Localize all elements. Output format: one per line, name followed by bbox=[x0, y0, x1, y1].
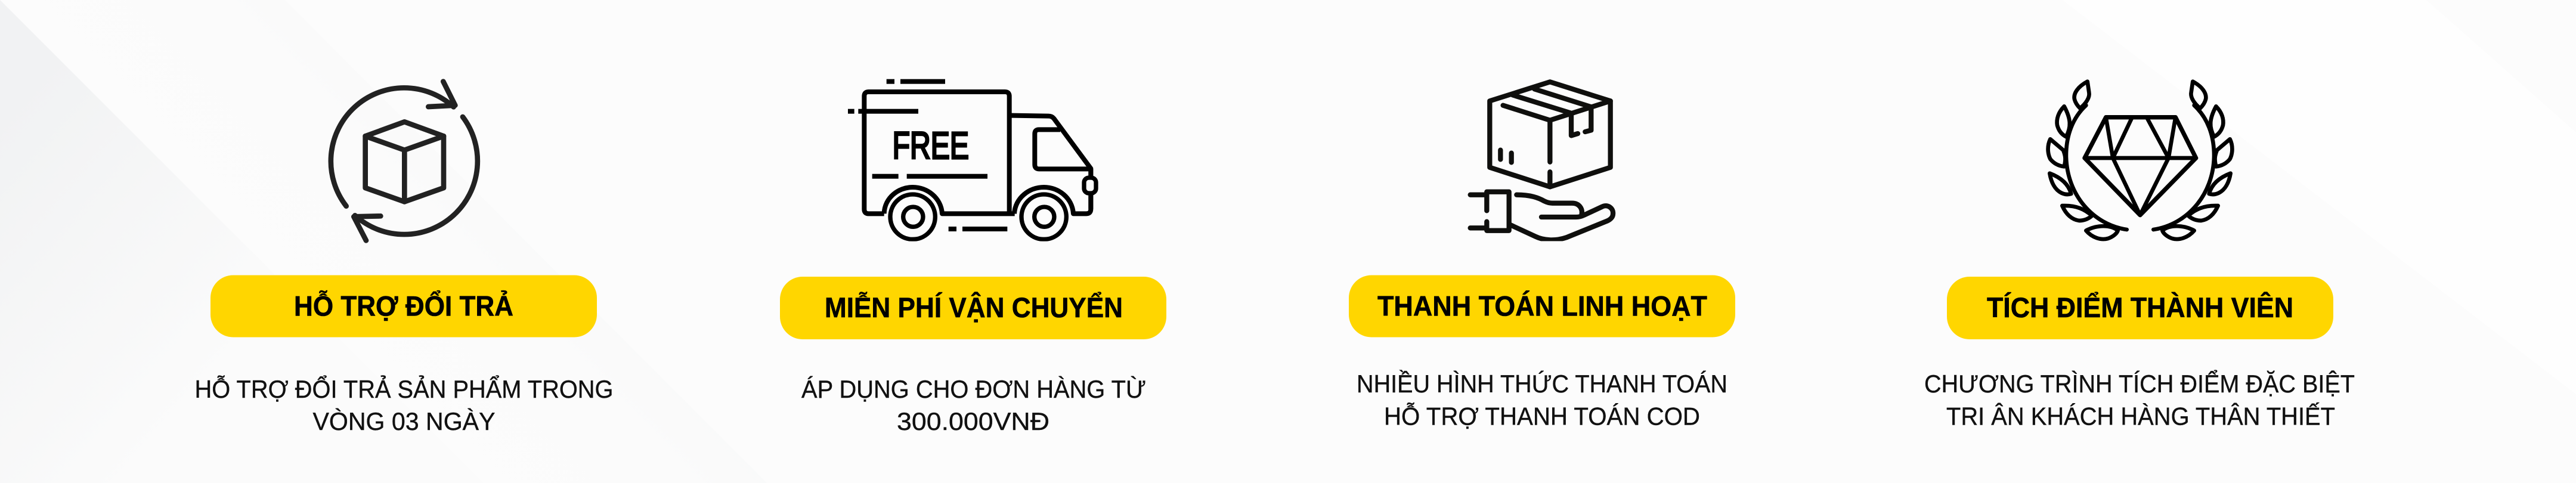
icon: free delivery truck: FREE bbox=[893, 124, 969, 167]
heading: TÍCH ĐIỂM THÀNH VIÊN bbox=[1987, 292, 2293, 323]
icon: free delivery truck bbox=[848, 79, 1096, 239]
panel: member points bbox=[1924, 82, 2355, 431]
description: HỖ TRỢ THANH TOÁN COD bbox=[1384, 402, 1700, 431]
description bbox=[1924, 369, 2355, 431]
icon: parcel over open hand bbox=[1470, 82, 1613, 240]
description: NHIỀU HÌNH THỨC THANH TOÁN bbox=[1357, 370, 1727, 398]
description: TRI ÂN KHÁCH HÀNG THÂN THIẾT bbox=[1946, 402, 2335, 431]
panel: returns support bbox=[194, 82, 613, 435]
description bbox=[1357, 370, 1727, 431]
description: HỖ TRỢ ĐỔI TRẢ SẢN PHẨM TRONG bbox=[194, 374, 613, 403]
icon: diamond in laurel wreath bbox=[2048, 82, 2232, 239]
heading: MIỄN PHÍ VẬN CHUYỂN bbox=[825, 292, 1123, 323]
pill: heading background bbox=[1947, 277, 2333, 339]
pill: heading background bbox=[210, 275, 597, 338]
icon: box with rotating arrows bbox=[331, 82, 478, 240]
pill: heading background bbox=[780, 277, 1166, 339]
pill: heading background bbox=[1349, 275, 1735, 338]
panel: flexible payment bbox=[1349, 82, 1735, 431]
description: ÁP DỤNG CHO ĐƠN HÀNG TỪ bbox=[801, 375, 1146, 403]
heading: HỖ TRỢ ĐỔI TRẢ bbox=[294, 290, 513, 322]
panel: free shipping bbox=[780, 79, 1166, 435]
description: VÒNG 03 NGÀY bbox=[312, 407, 495, 435]
description: CHƯƠNG TRÌNH TÍCH ĐIỂM ĐẶC BIỆT bbox=[1924, 369, 2355, 398]
description: 300.000VNĐ bbox=[897, 407, 1049, 435]
description bbox=[801, 375, 1146, 435]
description bbox=[194, 374, 613, 435]
heading: THANH TOÁN LINH HOẠT bbox=[1377, 290, 1707, 322]
